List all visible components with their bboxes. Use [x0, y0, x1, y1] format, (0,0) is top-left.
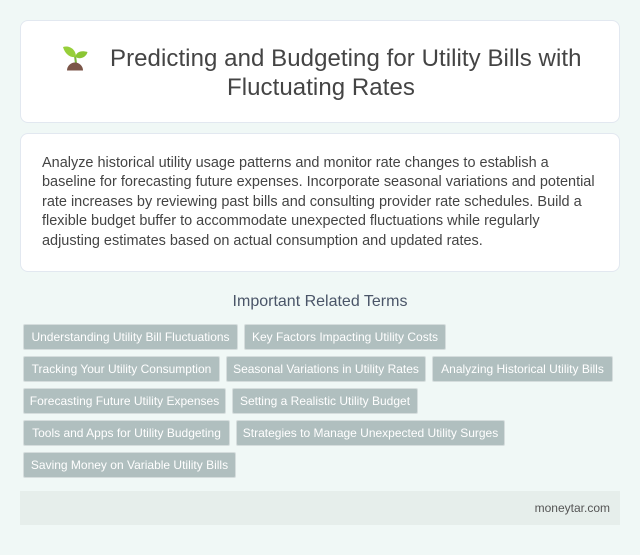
tag — [226, 356, 426, 382]
icon: seedling — [63, 46, 88, 70]
tag — [23, 452, 236, 478]
text block: summary: adjusting estimates based on actual consumption and updated rates. — [42, 233, 483, 249]
heading: related terms: Important Related Terms — [233, 293, 407, 310]
tag — [23, 356, 220, 382]
title: Predicting and Budgeting for Utility Bills with — [110, 45, 582, 72]
tag list: related terms — [23, 324, 613, 478]
tag — [23, 420, 230, 446]
tag — [236, 420, 505, 446]
footer bar — [20, 491, 620, 525]
tag: Analyzing Historical Utility Bills — [441, 362, 604, 376]
tag: Forecasting Future Utility Expenses — [30, 394, 219, 408]
title: Fluctuating Rates — [227, 74, 415, 101]
tag: Seasonal Variations in Utility Rates — [233, 362, 419, 376]
tag — [23, 388, 226, 414]
tag: Tools and Apps for Utility Budgeting — [32, 426, 221, 440]
panel: title card — [20, 20, 620, 123]
tag: Saving Money on Variable Utility Bills — [31, 458, 228, 472]
tag: Setting a Realistic Utility Budget — [240, 394, 410, 408]
tag: Strategies to Manage Unexpected Utility Surges — [243, 426, 498, 440]
text block: summary — [42, 155, 595, 249]
text block: summary: rate increases by reviewing past bills and consulting provider rate schedules. Build a — [42, 194, 582, 210]
text block: summary: Analyze historical utility usage patterns and monitor rate changes to establish a — [42, 155, 549, 171]
tag — [232, 388, 418, 414]
text block: summary: baseline for forecasting future expenses. Incorporate seasonal variations and potential — [42, 174, 595, 190]
tag: Understanding Utility Bill Fluctuations — [31, 330, 230, 344]
tag — [244, 324, 446, 350]
tag — [432, 356, 613, 382]
title — [110, 45, 582, 101]
text block: summary: flexible budget buffer to accommodate unexpected fluctuations while regularly — [42, 213, 540, 229]
footer source text: moneytar.com — [535, 501, 610, 515]
panel: summary text — [20, 133, 620, 272]
tag: Tracking Your Utility Consumption — [32, 362, 211, 376]
tag: Key Factors Impacting Utility Costs — [252, 330, 438, 344]
tag — [23, 324, 238, 350]
